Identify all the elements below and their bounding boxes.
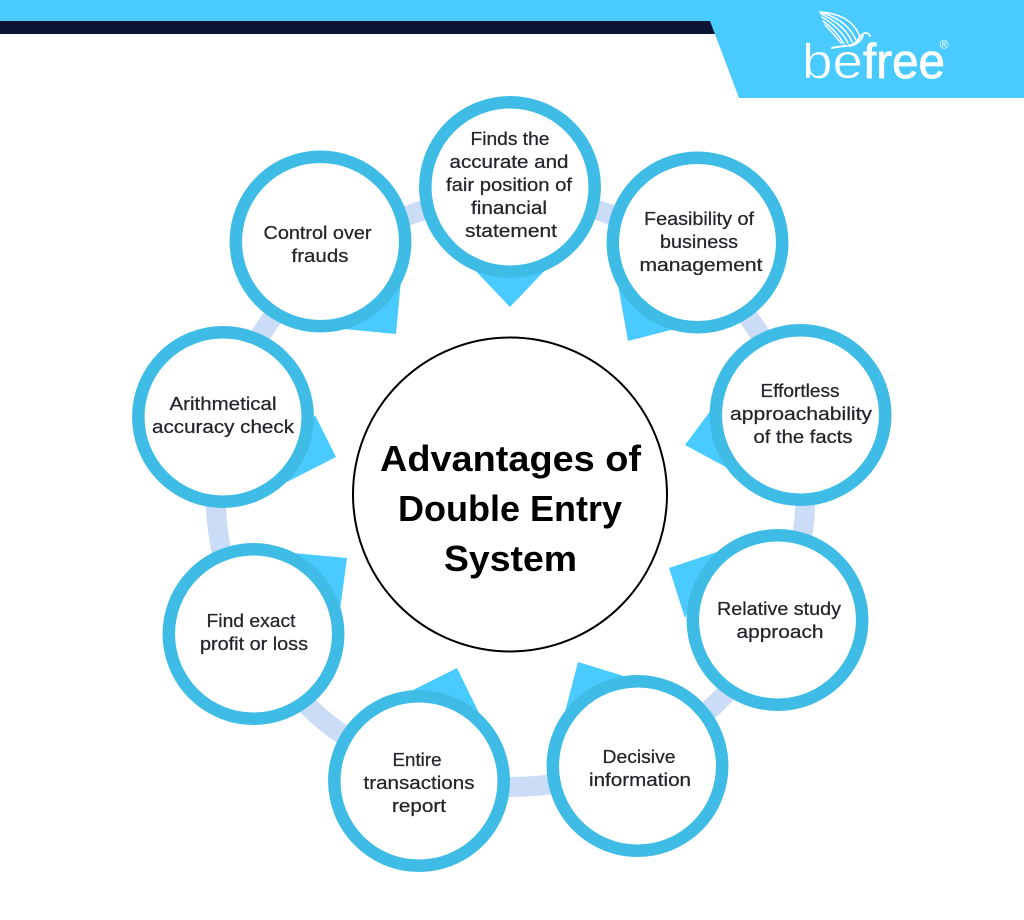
logo: befree — [802, 12, 949, 89]
logo: befree: ® — [940, 38, 949, 52]
node: Effortless approachability of the facts: Effortless — [760, 380, 840, 401]
logo: befree: be — [802, 35, 863, 89]
node: Decisive information: Decisive — [602, 746, 676, 767]
node: Finds the accurate and fair position: financial — [471, 197, 547, 218]
node: Decisive information — [553, 662, 722, 851]
node: Arithmetical accuracy check: Arithmetical — [170, 393, 276, 414]
title: Double Entry — [398, 488, 622, 529]
node: Effortless approachability of the facts — [685, 330, 885, 500]
node: Relative study approach — [669, 535, 862, 705]
node: Feasibility of business management: Feasibility of — [644, 208, 755, 229]
node: Finds the accurate and fair position — [425, 102, 595, 307]
center circle with title — [353, 338, 667, 652]
node: Control over frauds: frauds — [292, 245, 348, 266]
icon: bird — [820, 12, 870, 48]
node: Arithmetical accuracy check: accuracy check — [152, 416, 295, 437]
node: Feasibility of business management — [613, 158, 782, 341]
node: Feasibility of business management: management — [640, 254, 762, 275]
connector ring — [216, 197, 806, 787]
node: Finds the accurate and fair position: accurate and — [450, 151, 568, 172]
node: Relative study approach: approach — [736, 621, 824, 642]
node: Finds the accurate and fair position: statement — [465, 220, 557, 241]
node: Control over frauds: Control over — [264, 222, 372, 243]
node: Entire transactions report: Entire — [392, 749, 442, 770]
header band — [0, 0, 1024, 98]
node: Finds the accurate and fair position: fair position of — [446, 174, 573, 195]
node: Decisive information: information — [589, 769, 691, 790]
node: Entire transactions report: transactions — [364, 772, 474, 793]
node: Entire transactions report — [334, 668, 504, 866]
node: Effortless approachability of the facts: of the facts — [754, 426, 852, 447]
node: Relative study approach: Relative study — [717, 598, 842, 619]
node: Find exact profit or loss: Find exact — [206, 610, 296, 631]
node: Arithmetical accuracy check — [138, 332, 336, 502]
node: Feasibility of business management: business — [660, 231, 738, 252]
node: Find exact profit or loss — [169, 549, 347, 719]
node: Finds the accurate and fair position: Finds the — [470, 128, 550, 149]
node: Entire transactions report: report — [392, 795, 446, 816]
logo: befree: free — [863, 35, 945, 89]
node: Find exact profit or loss: profit or loss — [200, 633, 308, 654]
node: Control over frauds — [236, 157, 405, 334]
node: Effortless approachability of the facts: approachability — [730, 403, 873, 424]
title: System — [444, 538, 577, 579]
title — [380, 438, 642, 579]
title: Advantages of — [380, 438, 642, 479]
